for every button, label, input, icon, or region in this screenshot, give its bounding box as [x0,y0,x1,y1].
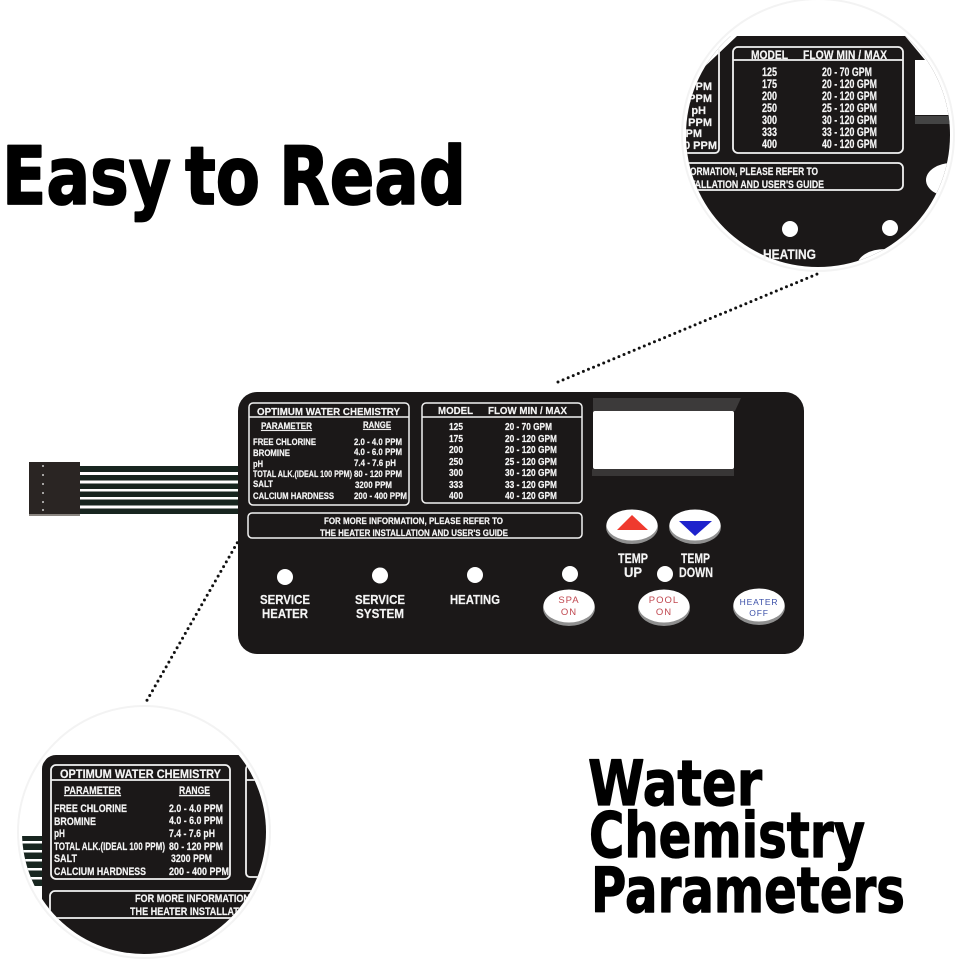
table: optimum water chemistry [249,403,409,505]
heading: Easy to Read: Read [279,130,466,223]
table: optimum water chemistry: 7.4 - 7.6 pH [354,458,396,469]
table: optimum water chemistry: PARAMETER [261,421,312,432]
table: optimum water chemistry: RANGE [363,420,391,431]
flow table zoomed: 20 - 120 GPM [822,77,877,91]
chemistry table zoomed: 2.0 - 4.0 PPM [169,803,223,815]
flow table zoomed: 30 - 120 GPM [822,113,877,127]
magnifier: top right flow table: PPM [688,93,712,105]
table: optimum water chemistry: CALCIUM HARDNESS [253,491,334,502]
table: model flow min max: 20 - 70 GPM [505,421,552,433]
chemistry table zoomed: 200 - 400 PPM [169,866,229,878]
LEDs and heating label zoomed [763,220,898,262]
chemistry table zoomed: TOTAL ALK.(IDEAL 100 PPM) [54,841,165,853]
temp labels: UP [624,564,642,580]
chemistry table zoomed: PARAMETER [64,785,121,797]
table: model flow min max: 40 - 120 GPM [505,490,557,502]
heading: Easy to Read [2,130,466,223]
flow table zoomed: MODEL [751,48,788,62]
note box zoomed [49,890,252,919]
temp labels: DOWN [679,564,713,580]
table: model flow min max: FLOW MIN / MAX [488,405,567,417]
table: optimum water chemistry: TOTAL ALK.(IDEAL 100 PPM) [253,469,352,480]
table: model flow min max: 400 [449,490,463,502]
note box: FOR MORE INFORMATION, PLEASE REFER TO [324,516,503,527]
control panel [238,392,804,654]
note box zoomed: FOR MORE INFORMATION [135,893,250,905]
LEDs and heating label zoomed: HEATING [763,247,816,262]
button: temp up [606,510,658,544]
table: model flow min max: 30 - 120 GPM [505,467,557,479]
table: model flow min max: 20 - 120 GPM [505,433,557,445]
flow table zoomed: 300 [762,113,777,127]
button: heater off [733,588,785,625]
button: spa on: SPA [558,595,580,606]
chemistry table zoomed: 3200 PPM [171,853,212,865]
LED labels [260,592,500,621]
ribbon cable and connector [29,462,240,516]
table: optimum water chemistry: OPTIMUM WATER CHEMISTRY [257,406,400,418]
note box [248,513,582,539]
table: optimum water chemistry: 200 - 400 PPM [354,491,407,502]
table: model flow min max: 250 [449,456,463,468]
magnifier: top right flow table [681,0,955,272]
chemistry table zoomed: 80 - 120 PPM [169,841,223,853]
temp labels: TEMP [618,550,648,566]
indicator LEDs [277,566,673,585]
button: heater off: OFF [749,608,769,618]
flow table zoomed: 400 [762,137,777,151]
temp labels: TEMP [681,550,710,566]
LED labels: SERVICE [260,592,310,607]
flow table zoomed: 20 - 120 GPM [822,89,877,103]
table: model flow min max: MODEL [438,405,474,417]
chemistry table zoomed: RANGE [179,785,210,797]
button: temp down [669,510,721,544]
magnifier: bottom left chemistry table [17,705,271,959]
table: model flow min max: 333 [449,479,463,491]
magnifier: top right flow table: 00 PPM [678,140,717,152]
table: model flow min max: 175 [449,433,463,445]
chemistry table zoomed: 4.0 - 6.0 PPM [169,815,223,827]
flow table zoomed: 125 [762,65,777,79]
table: model flow min max: 20 - 120 GPM [505,444,557,456]
flow table zoomed: 250 [762,101,777,115]
LED labels: SERVICE [355,592,405,607]
table: model flow min max: 33 - 120 GPM [505,479,557,491]
chemistry table zoomed: OPTIMUM WATER CHEMISTRY [60,767,221,781]
heading: Easy to Read: to [185,130,260,223]
table: model flow min max: 300 [449,467,463,479]
flow table zoomed: 333 [762,125,777,139]
button: pool on: POOL [649,595,679,606]
chemistry table zoomed: BROMINE [54,816,96,828]
heading: Easy to Read: Easy [2,130,171,223]
note box zoomed: ORMATION, PLEASE REFER TO [690,166,818,178]
chemistry table zoomed: CALCIUM HARDNESS [54,866,146,878]
LED labels: HEATING [450,592,500,607]
dotted leader: panel to top magnifier [558,272,822,382]
chemistry table zoomed [51,765,230,879]
table: model flow min max: 125 [449,421,463,433]
note box zoomed [660,163,903,191]
LED labels: HEATER [262,606,309,621]
table: model flow min max [422,403,582,503]
magnifier: top right flow table: PPM [688,117,712,129]
button: spa on: ON [561,607,577,618]
display window [592,398,741,476]
flow table zoomed: 175 [762,77,777,91]
chemistry table zoomed: 7.4 - 7.6 pH [169,828,215,840]
table: optimum water chemistry: 2.0 - 4.0 PPM [354,437,402,448]
flow table zoomed: FLOW MIN / MAX [803,48,887,62]
LED labels: SYSTEM [356,606,404,621]
note box zoomed: TALLATION AND USER'S GUIDE [690,179,824,191]
table: optimum water chemistry: pH [253,459,263,470]
flow table zoomed: 25 - 120 GPM [822,101,877,115]
temp labels [618,550,713,580]
button: heater off: HEATER [740,597,778,607]
flow table zoomed: 40 - 120 GPM [822,137,877,151]
magnifier: top right flow table: PM [686,128,702,140]
dotted leader: panel to bottom magnifier [146,538,240,702]
button: pool on [638,590,690,626]
magnifier: top right flow table: PM [696,81,712,93]
chemistry table zoomed: FREE CHLORINE [54,803,127,815]
table: optimum water chemistry: SALT [253,479,273,490]
table: optimum water chemistry: 80 - 120 PPM [354,469,402,480]
flow table zoomed: 20 - 70 GPM [822,65,872,79]
flow table zoomed: 200 [762,89,777,103]
note box zoomed: THE HEATER INSTALLATION [130,906,255,918]
table: optimum water chemistry: FREE CHLORINE [253,437,316,448]
heading: Water Chemistry Parameters [588,747,905,927]
button: spa on [543,590,595,626]
heading: Water Chemistry Parameters: Chemistry [589,799,865,872]
heading: Water Chemistry Parameters: Water [588,747,762,820]
table: model flow min max: 200 [449,444,463,456]
table: optimum water chemistry: 3200 PPM [355,480,392,491]
button: pool on: ON [656,607,672,618]
magnifier: top right flow table: pH [691,105,706,117]
table: optimum water chemistry: 4.0 - 6.0 PPM [354,447,402,458]
note box: THE HEATER INSTALLATION AND USER'S GUIDE [320,528,508,539]
flow table zoomed: 33 - 120 GPM [822,125,877,139]
table: optimum water chemistry: BROMINE [253,448,290,459]
table: model flow min max: 25 - 120 GPM [505,456,557,468]
chemistry table zoomed: SALT [54,853,77,865]
flow table zoomed [733,47,903,153]
chemistry table zoomed: pH [54,828,65,840]
